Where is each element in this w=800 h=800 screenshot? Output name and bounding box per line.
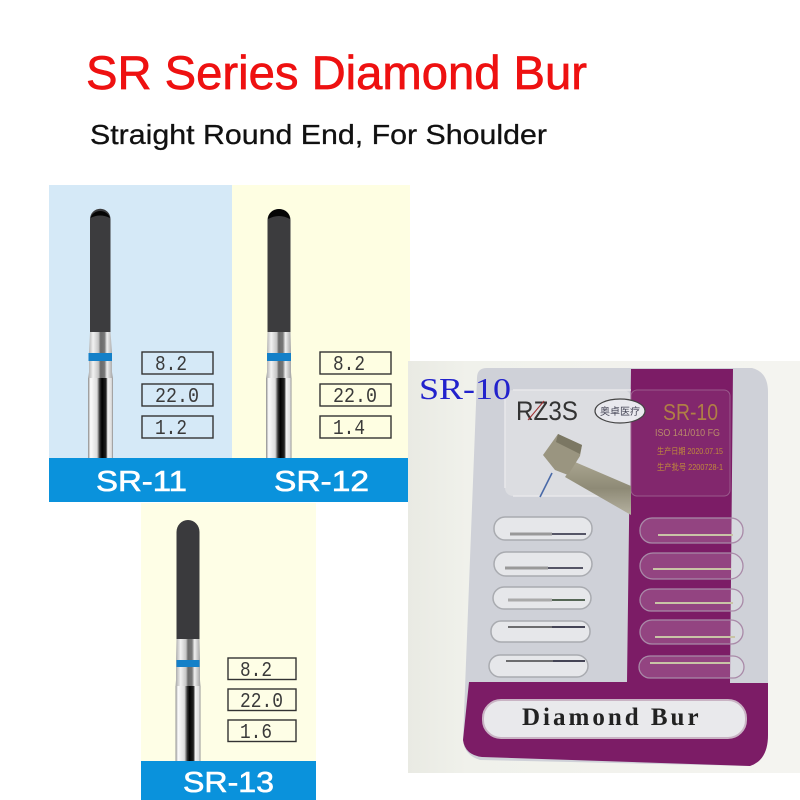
brand badge: [595, 399, 645, 423]
bur capsules: left column: [489, 517, 592, 677]
brand logo: RZ3S: [516, 396, 578, 426]
model label: SR-10: SR-10: [419, 371, 511, 406]
dimension boxes: SR-11: 22.0: [155, 386, 199, 409]
label banner: SR-11 SR-12: SR-12: [274, 466, 369, 498]
dimension boxes: SR-11: [142, 352, 213, 441]
label banner: SR-11 SR-12: [49, 458, 408, 502]
subtitle: Straight Round End, For Shoulder: [90, 119, 547, 150]
title: SR Series Diamond Bur: [86, 46, 587, 99]
dimension boxes: SR-13: [228, 658, 296, 745]
dimension boxes: SR-11: 8.2: [155, 354, 187, 377]
dimension boxes: SR-13: 22.0: [240, 691, 283, 714]
bur capsules: right column: [639, 518, 744, 678]
label capsule: Diamond Bur: [483, 700, 746, 738]
brand badge: 奥卓医疗: [600, 405, 640, 418]
package label text: ISO 141/010 FG: [655, 428, 720, 439]
package label text: 生产日期 2020.07.15: [657, 446, 723, 456]
label banner: SR-11 SR-12: SR-11: [96, 466, 187, 498]
panel: SR-11 and SR-12: [49, 185, 410, 502]
dimension boxes: SR-12: 8.2: [333, 354, 365, 377]
label capsule: Diamond Bur: Diamond Bur: [522, 704, 702, 731]
dimension boxes: SR-11: 1.2: [155, 418, 187, 441]
dimension boxes: SR-13: 8.2: [240, 660, 272, 683]
dimension boxes: SR-13: 1.6: [240, 722, 272, 745]
handpiece window: [505, 390, 730, 515]
dimension boxes: SR-12: 1.4: [333, 418, 365, 441]
blister card: [463, 368, 768, 766]
package label text: 生产批号 2200728-1: [657, 462, 723, 472]
label banner: SR-13: [141, 761, 316, 800]
panel: product photo: [408, 361, 800, 773]
label banner: SR-13: SR-13: [183, 767, 274, 799]
panel: SR-13: [141, 503, 316, 800]
icon: handpiece: [540, 434, 631, 515]
bur: SR-13: [176, 520, 200, 761]
bur: SR-12: [266, 209, 292, 458]
dimension boxes: SR-12: 22.0: [333, 386, 377, 409]
package label text: [655, 399, 723, 472]
dimension boxes: SR-12: [320, 352, 391, 441]
package label text: SR-10: [663, 399, 718, 425]
bur: SR-11: [88, 209, 113, 458]
